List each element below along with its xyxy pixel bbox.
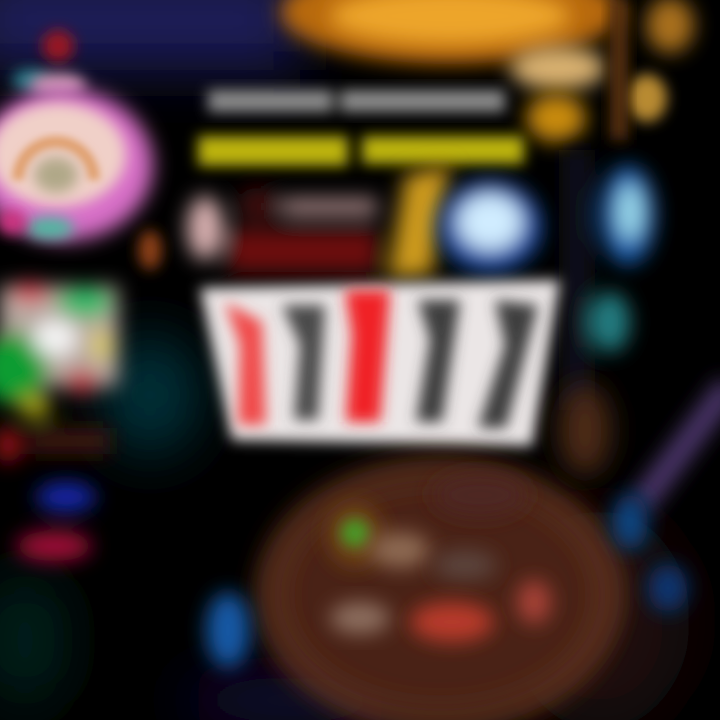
yellow subheading bar <box>198 136 524 166</box>
red seven 3 <box>345 290 390 422</box>
white slot reels panel <box>200 280 560 446</box>
dark seven 5 <box>478 300 538 428</box>
dark seven 4 <box>416 300 460 422</box>
dark seven 2 <box>282 305 325 420</box>
red seven 1 <box>225 302 266 425</box>
heading bar <box>208 90 505 112</box>
blue floor light <box>206 592 250 668</box>
gold coin pile top <box>280 0 694 142</box>
centre banner row <box>187 165 450 278</box>
left machine buttons <box>16 482 96 561</box>
right lower wall <box>559 384 720 612</box>
blue glowing orb <box>438 180 542 272</box>
left slot machine topper <box>0 30 162 270</box>
left slot machine screen <box>0 282 118 463</box>
roulette table <box>265 470 615 720</box>
right wall lights <box>566 150 656 410</box>
